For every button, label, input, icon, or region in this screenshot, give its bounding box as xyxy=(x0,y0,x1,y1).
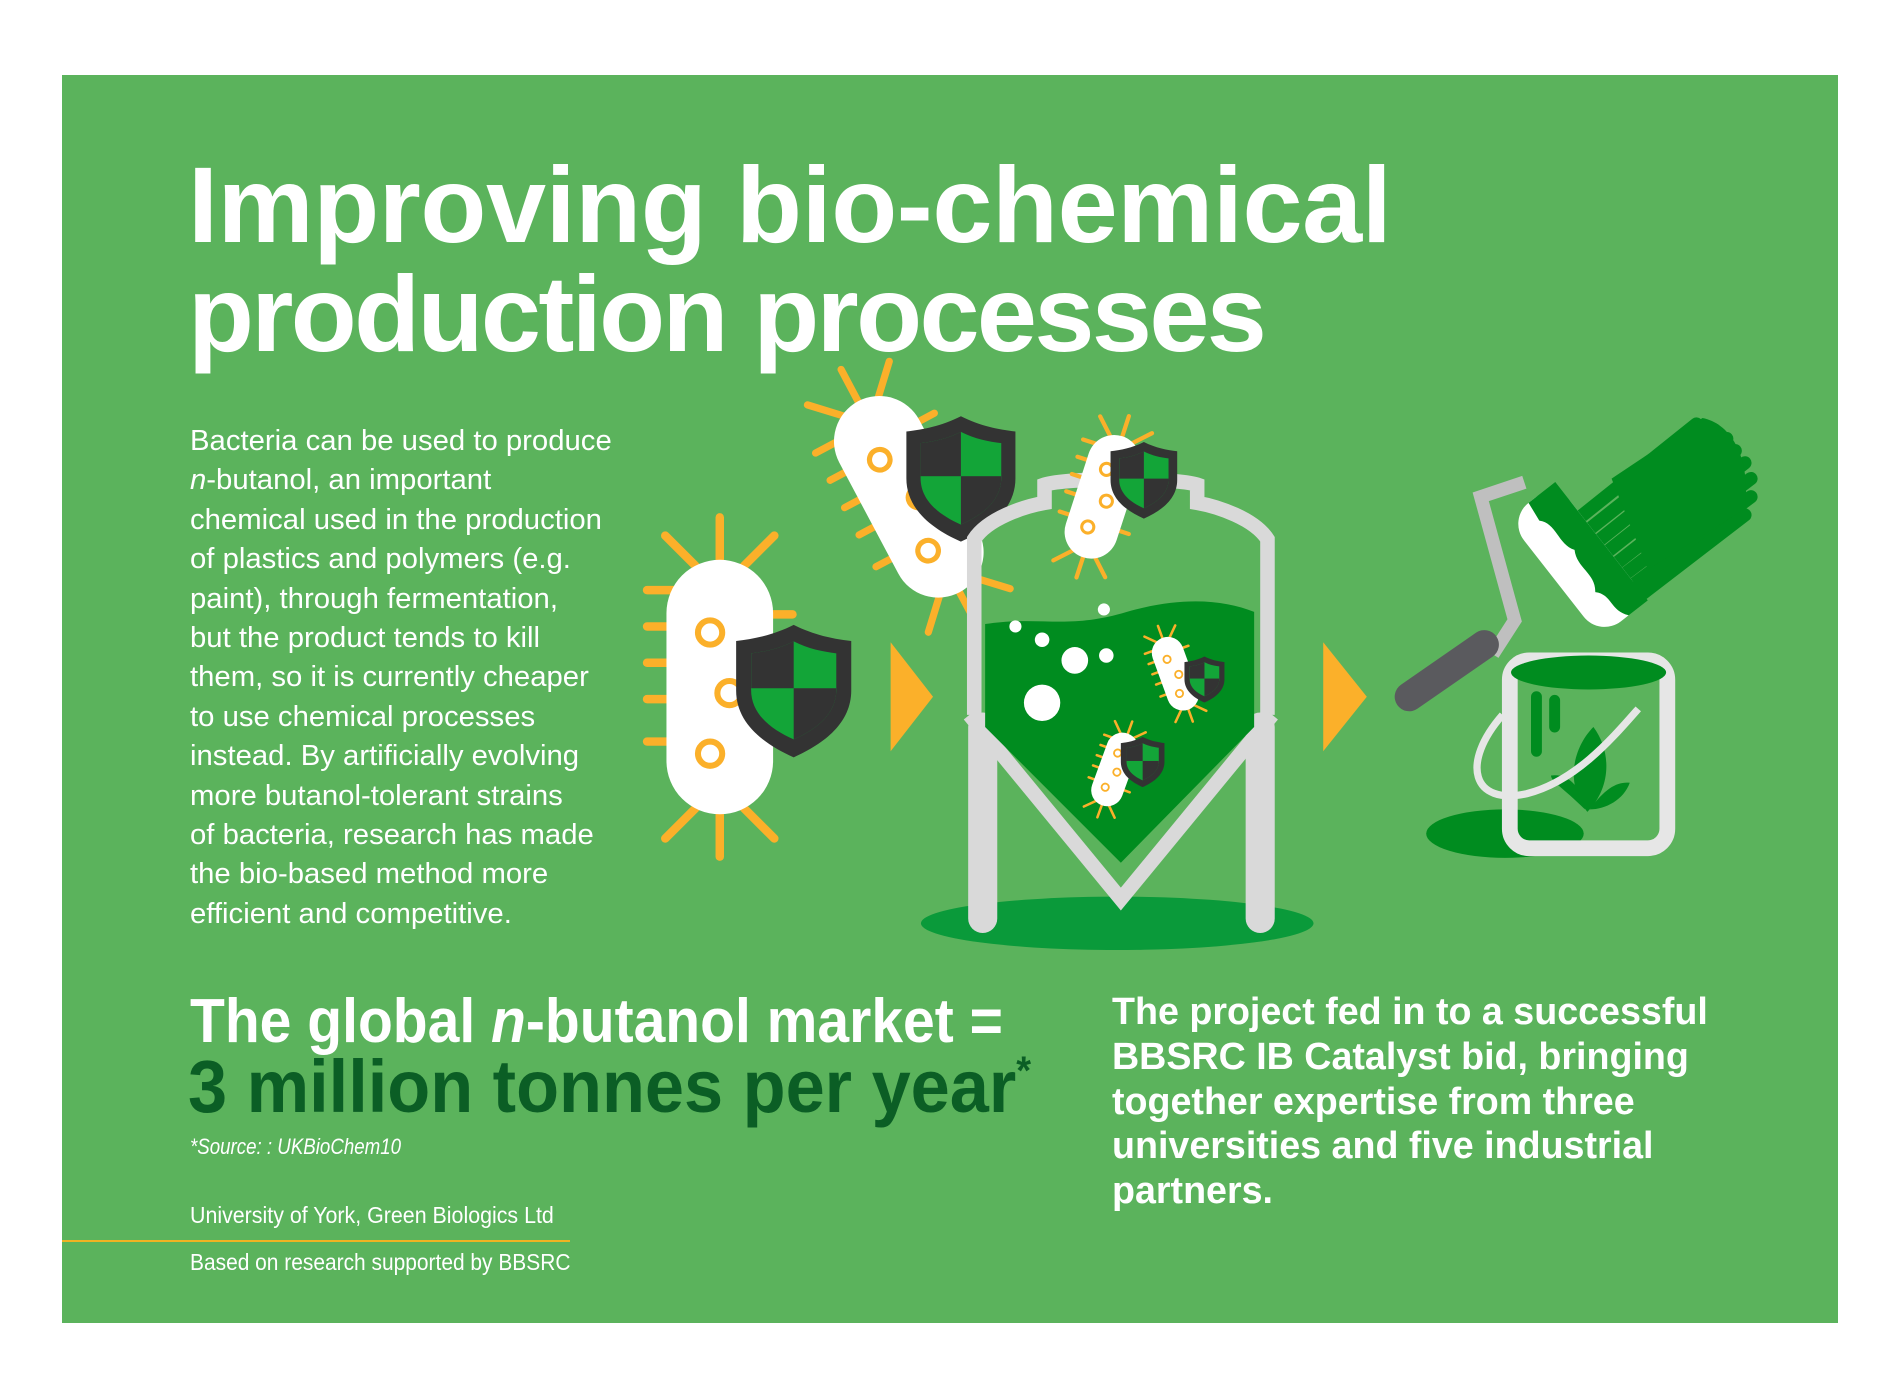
body text: to use chemical processes xyxy=(190,701,535,733)
body text: instead. By artificially evolving xyxy=(190,740,579,772)
title xyxy=(188,144,1391,374)
arrow 1 xyxy=(891,642,933,751)
body text: n-butanol, an important xyxy=(190,464,491,496)
title: production processes xyxy=(188,253,1264,374)
icon: paint roller xyxy=(1409,418,1751,697)
small bacterium with shield xyxy=(1042,405,1177,589)
body text: chemical used in the production xyxy=(190,504,602,536)
icon: paint bucket xyxy=(1426,656,1667,858)
research note: Based on research supported by BBSRC xyxy=(190,1249,570,1275)
illustration xyxy=(642,358,1758,950)
arrow 2 xyxy=(1323,642,1367,751)
body text: but the product tends to kill xyxy=(190,622,540,654)
big bacterium with shield xyxy=(647,517,851,857)
project text: partners. xyxy=(1112,1170,1273,1212)
body text: the bio-based method more xyxy=(190,858,548,890)
project text: universities and five industrial xyxy=(1112,1125,1653,1167)
body text: Bacteria can be used to produce xyxy=(190,425,612,457)
top bacterium with shield xyxy=(787,340,1031,653)
body text: them, so it is currently cheaper xyxy=(190,661,589,693)
project text: BBSRC IB Catalyst bid, bringing xyxy=(1112,1036,1689,1078)
body text: efficient and competitive. xyxy=(190,898,512,930)
project text xyxy=(1112,991,1708,1212)
stat value: 3 million tonnes per year* xyxy=(188,1045,1031,1128)
body text: paint), through fermentation, xyxy=(190,583,558,615)
title: Improving bio-chemical xyxy=(188,144,1391,265)
project text: The project fed in to a successful xyxy=(1112,991,1708,1033)
credits: University of York, Green Biologics Ltd xyxy=(190,1202,554,1228)
body text: of bacteria, research has made xyxy=(190,819,594,851)
divider orange xyxy=(62,1240,570,1242)
body text xyxy=(190,425,612,930)
source note: *Source: : UKBioChem10 xyxy=(190,1134,401,1159)
fermentation tank xyxy=(921,479,1314,950)
body text: more butanol-tolerant strains xyxy=(190,780,563,812)
body text: of plastics and polymers (e.g. xyxy=(190,543,571,575)
project text: together expertise from three xyxy=(1112,1081,1635,1123)
stat heading: The global n-butanol market = xyxy=(190,987,1003,1056)
